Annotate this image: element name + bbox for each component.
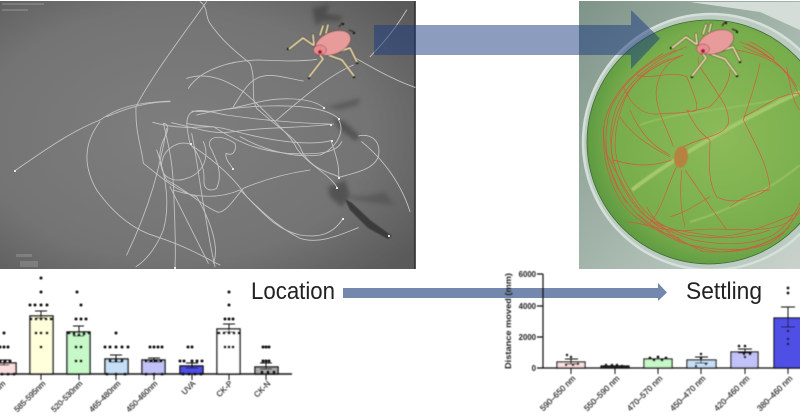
icon: aphid on leaf photo xyxy=(670,22,741,78)
category labels: 380–460 nm xyxy=(755,373,794,413)
y axis xyxy=(537,274,543,368)
petri dish rim xyxy=(583,14,800,270)
category labels: CK-N xyxy=(252,379,273,399)
bars xyxy=(557,318,800,368)
category labels: 450-460nm xyxy=(124,379,160,414)
arrow: bottom arrow from Location to Settling xyxy=(343,283,667,301)
leaf veins xyxy=(632,92,800,222)
heading: Settling: Settling xyxy=(686,278,762,305)
ticks xyxy=(41,374,266,380)
panel: leaf disc in petri dish with red trails xyxy=(579,1,800,270)
category labels: 590–650 nm xyxy=(538,373,577,413)
category labels: 520-530nm xyxy=(49,379,85,414)
movement trails xyxy=(15,2,415,268)
category labels xyxy=(0,379,273,414)
category labels: 465-480nm xyxy=(87,379,123,414)
category labels: 470–570 nm xyxy=(625,373,664,413)
heading: Location: Location xyxy=(251,278,335,305)
bar chart: settling distance moved xyxy=(503,270,800,413)
y axis numbers xyxy=(519,270,537,373)
data points xyxy=(565,287,789,367)
ticks xyxy=(571,368,788,374)
category labels: 420–460 nm xyxy=(712,373,751,413)
category labels: CK-P xyxy=(215,379,234,399)
photo overlay readouts xyxy=(2,3,44,267)
shadows of insects in the photo xyxy=(312,4,394,207)
error bars xyxy=(0,311,272,369)
category labels: 585-595nm xyxy=(12,379,48,414)
y axis numbers: 6000 xyxy=(519,270,537,279)
y axis numbers: 4000 xyxy=(519,302,537,311)
category labels: 550–590 nm xyxy=(582,373,621,413)
y axis title: Distance moved (mm) xyxy=(503,273,513,369)
green leaf disc xyxy=(587,20,800,264)
y axis numbers: 2000 xyxy=(519,333,537,342)
bar chart: location wavelengths xyxy=(0,276,292,414)
data points xyxy=(0,276,276,376)
axis baseline xyxy=(0,373,292,375)
category labels: UVA xyxy=(180,379,198,397)
category labels xyxy=(538,373,794,413)
category labels: 450–470 nm xyxy=(668,373,707,413)
brown aphid on leaf xyxy=(673,146,688,168)
arrow: top blue arrow from tracking photo to leaf photo xyxy=(374,10,660,69)
panel: grey video tracking photo with movement trails xyxy=(0,1,416,269)
axis baseline xyxy=(543,367,800,369)
error bars xyxy=(565,307,795,364)
icon: aphid on tracking photo xyxy=(287,23,358,79)
trail end markers xyxy=(14,107,390,269)
bars xyxy=(0,316,278,374)
red trails xyxy=(603,42,800,252)
y axis numbers: 0 xyxy=(532,364,537,373)
